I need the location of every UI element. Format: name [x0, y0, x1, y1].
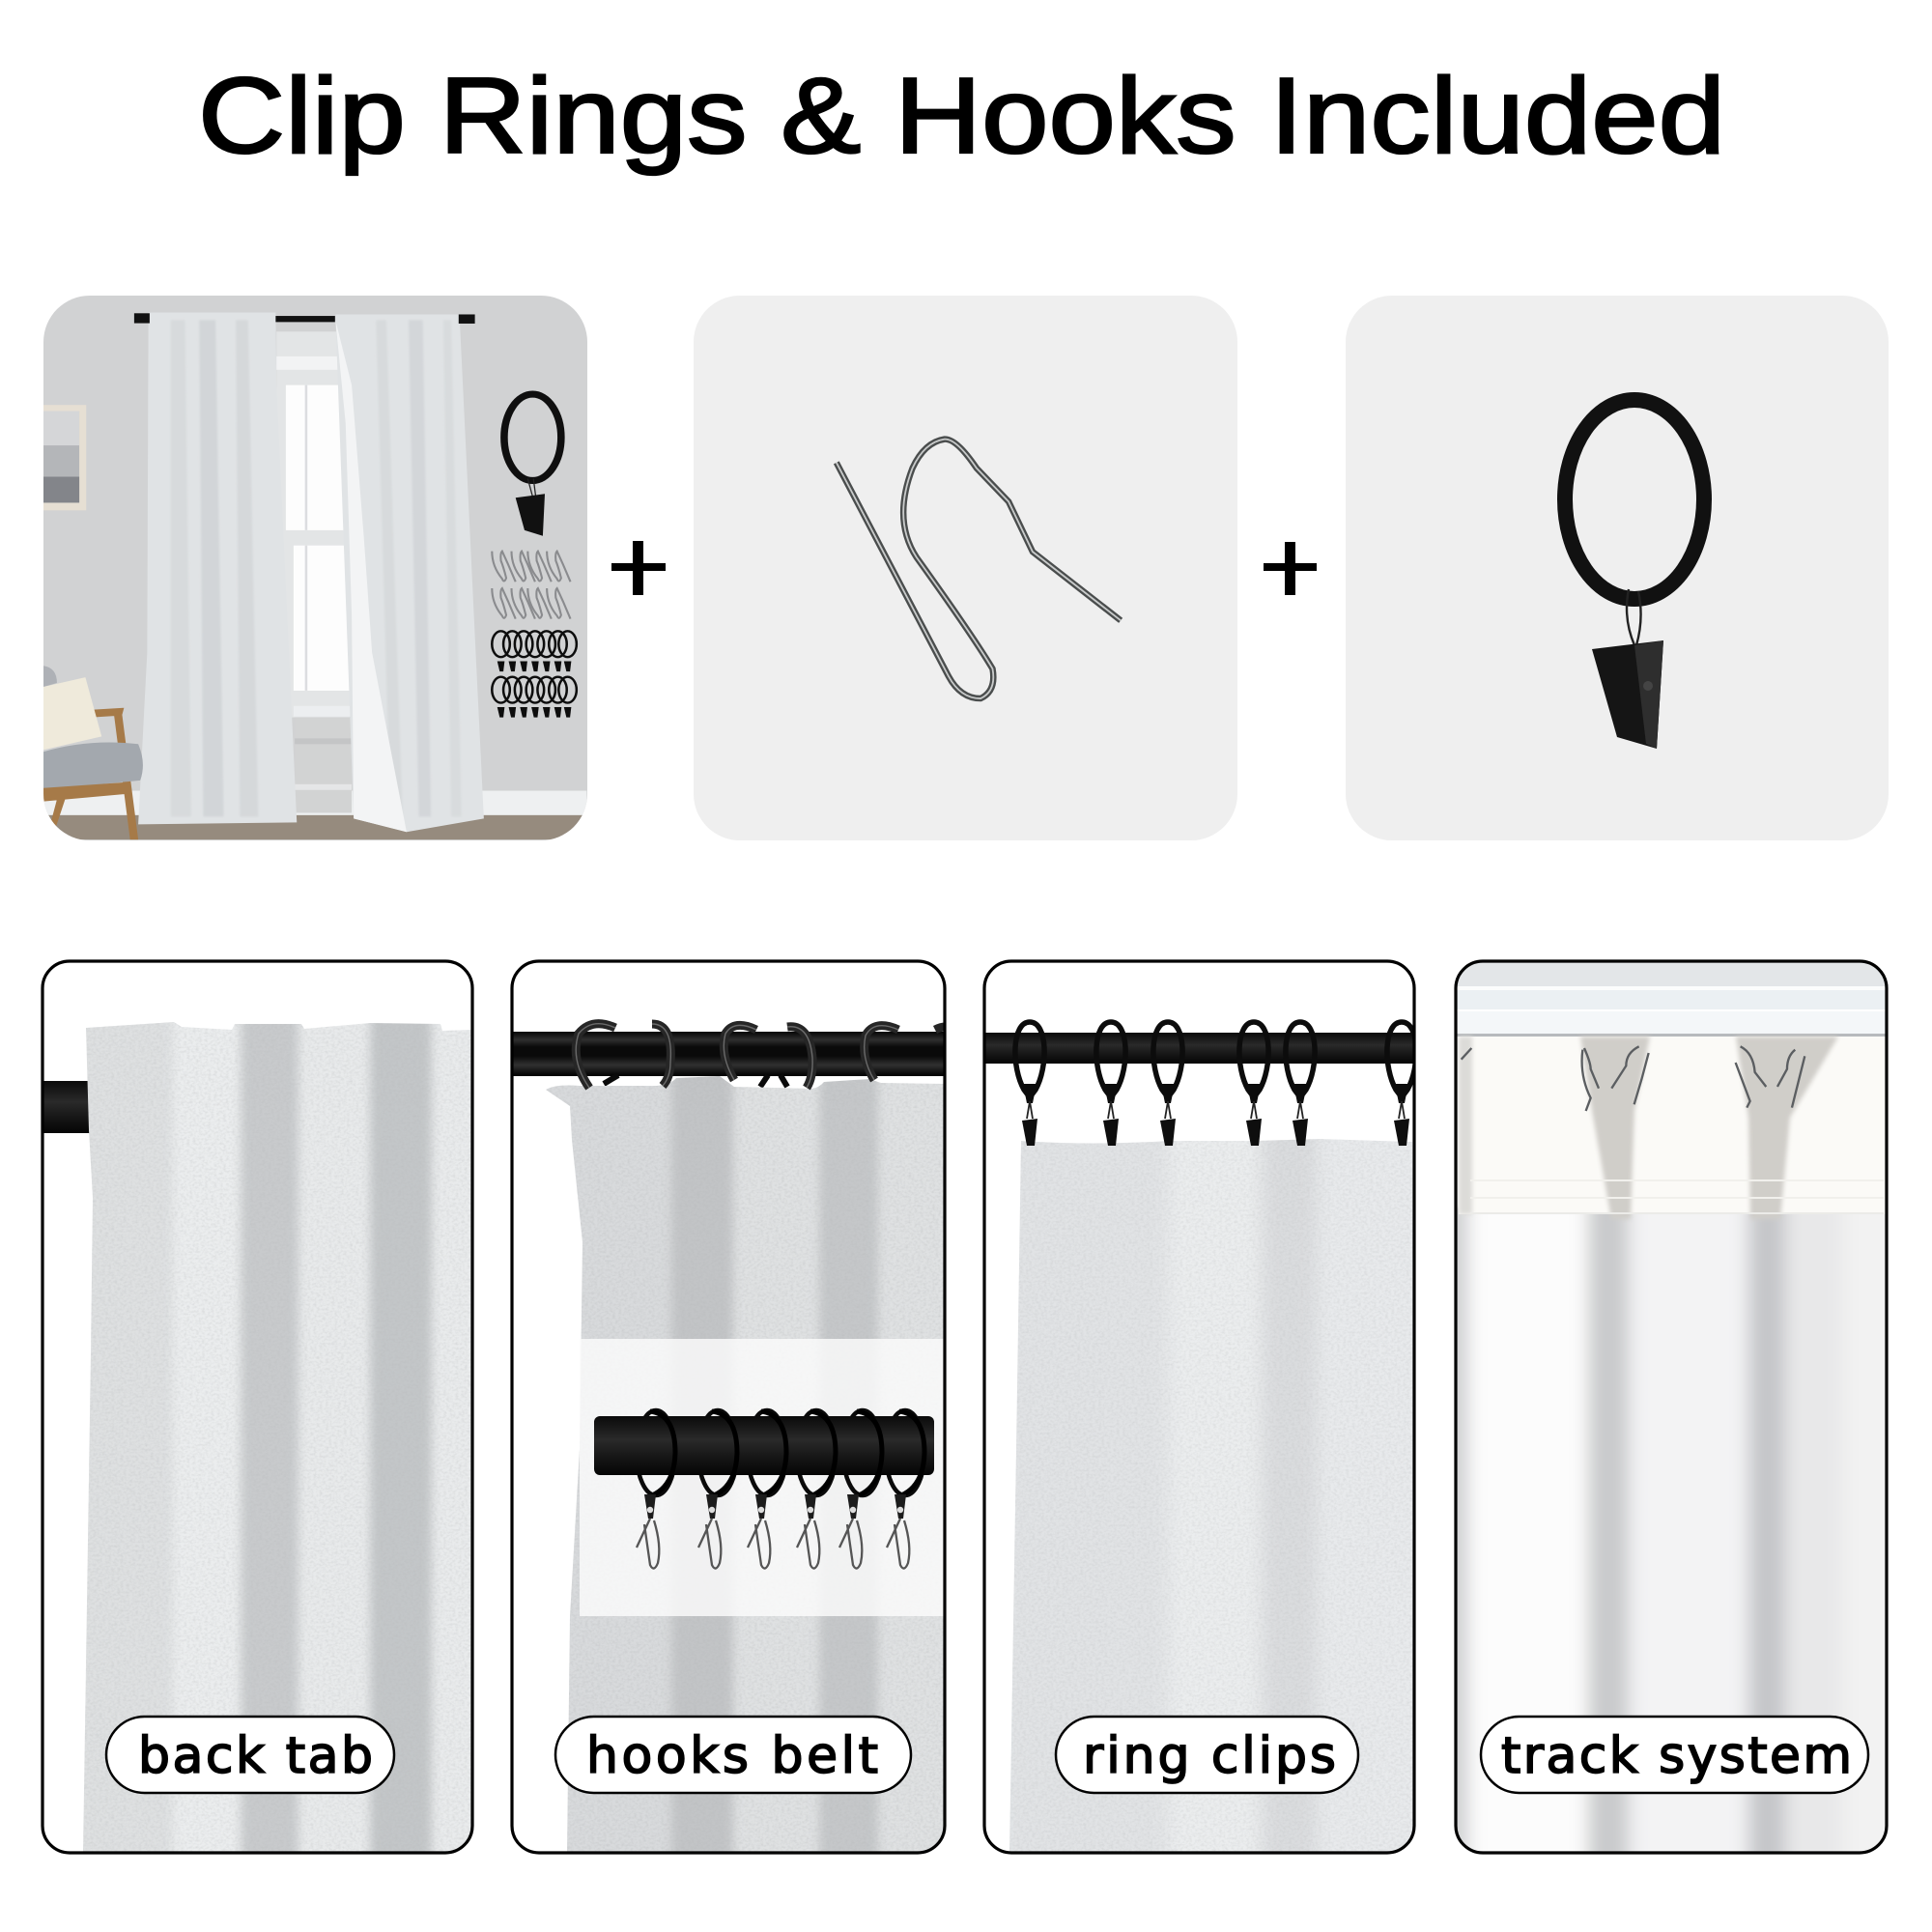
icon: metal pin hook: [837, 440, 1121, 698]
top rod behind rings: [512, 1032, 947, 1087]
rings on top rod: [576, 1024, 945, 1088]
ring highlights: [576, 1024, 898, 1088]
panel: single ring clip: [1346, 296, 1889, 840]
floor: [43, 814, 586, 839]
panel: hooks belt: [512, 961, 965, 1874]
label pill: [1056, 1717, 1358, 1793]
label pill: [106, 1717, 394, 1793]
icon: ring clip: [504, 394, 561, 536]
label pill: hooks belt: [586, 1727, 878, 1785]
curtain: [83, 1022, 471, 1851]
white band inset: [580, 1339, 947, 1616]
label pill: ring clips: [1083, 1727, 1336, 1785]
panel: back tab: [43, 961, 490, 1874]
clip rings: [1015, 1022, 1416, 1146]
title: Clip Rings & Hooks Included: [198, 56, 1725, 176]
left curtain: [138, 312, 297, 824]
label pill: [1481, 1717, 1868, 1793]
window: [276, 331, 352, 812]
rod: [984, 1033, 1414, 1064]
curtain rod: [134, 313, 475, 324]
armchair and pillow: [43, 666, 143, 839]
lower curtain folds: [1439, 1208, 1901, 1864]
rod: [43, 1081, 93, 1133]
rings behind inset rod: [637, 1410, 924, 1495]
rings in front of inset rod: [650, 1411, 924, 1495]
hooks under inset rings: [637, 1494, 909, 1569]
icon: set of hooks: [492, 552, 571, 619]
label pill: [555, 1717, 911, 1793]
panel: single hook: [694, 296, 1237, 840]
panel: ring clips: [984, 961, 1433, 1874]
icon: set of ring clips: [492, 631, 577, 718]
curtain: [546, 1076, 943, 1851]
header fabric: [1459, 1037, 1889, 1219]
label pill: back tab: [138, 1727, 373, 1785]
label pill: track system: [1501, 1727, 1852, 1785]
wall picture: [41, 405, 86, 510]
plus sign 1: [611, 541, 666, 595]
track hooks: [1462, 1046, 1804, 1111]
inset rod: [594, 1416, 934, 1475]
panel: room photo with curtains: [41, 296, 587, 840]
curtain: [1009, 1139, 1412, 1851]
plus sign 2: [1264, 542, 1317, 595]
right curtain: [335, 314, 484, 832]
panel: track system: [1439, 961, 1901, 1864]
icon: large ring with clip: [1565, 400, 1704, 749]
ceiling track: [1456, 961, 1887, 1037]
baseboard: [43, 791, 586, 815]
